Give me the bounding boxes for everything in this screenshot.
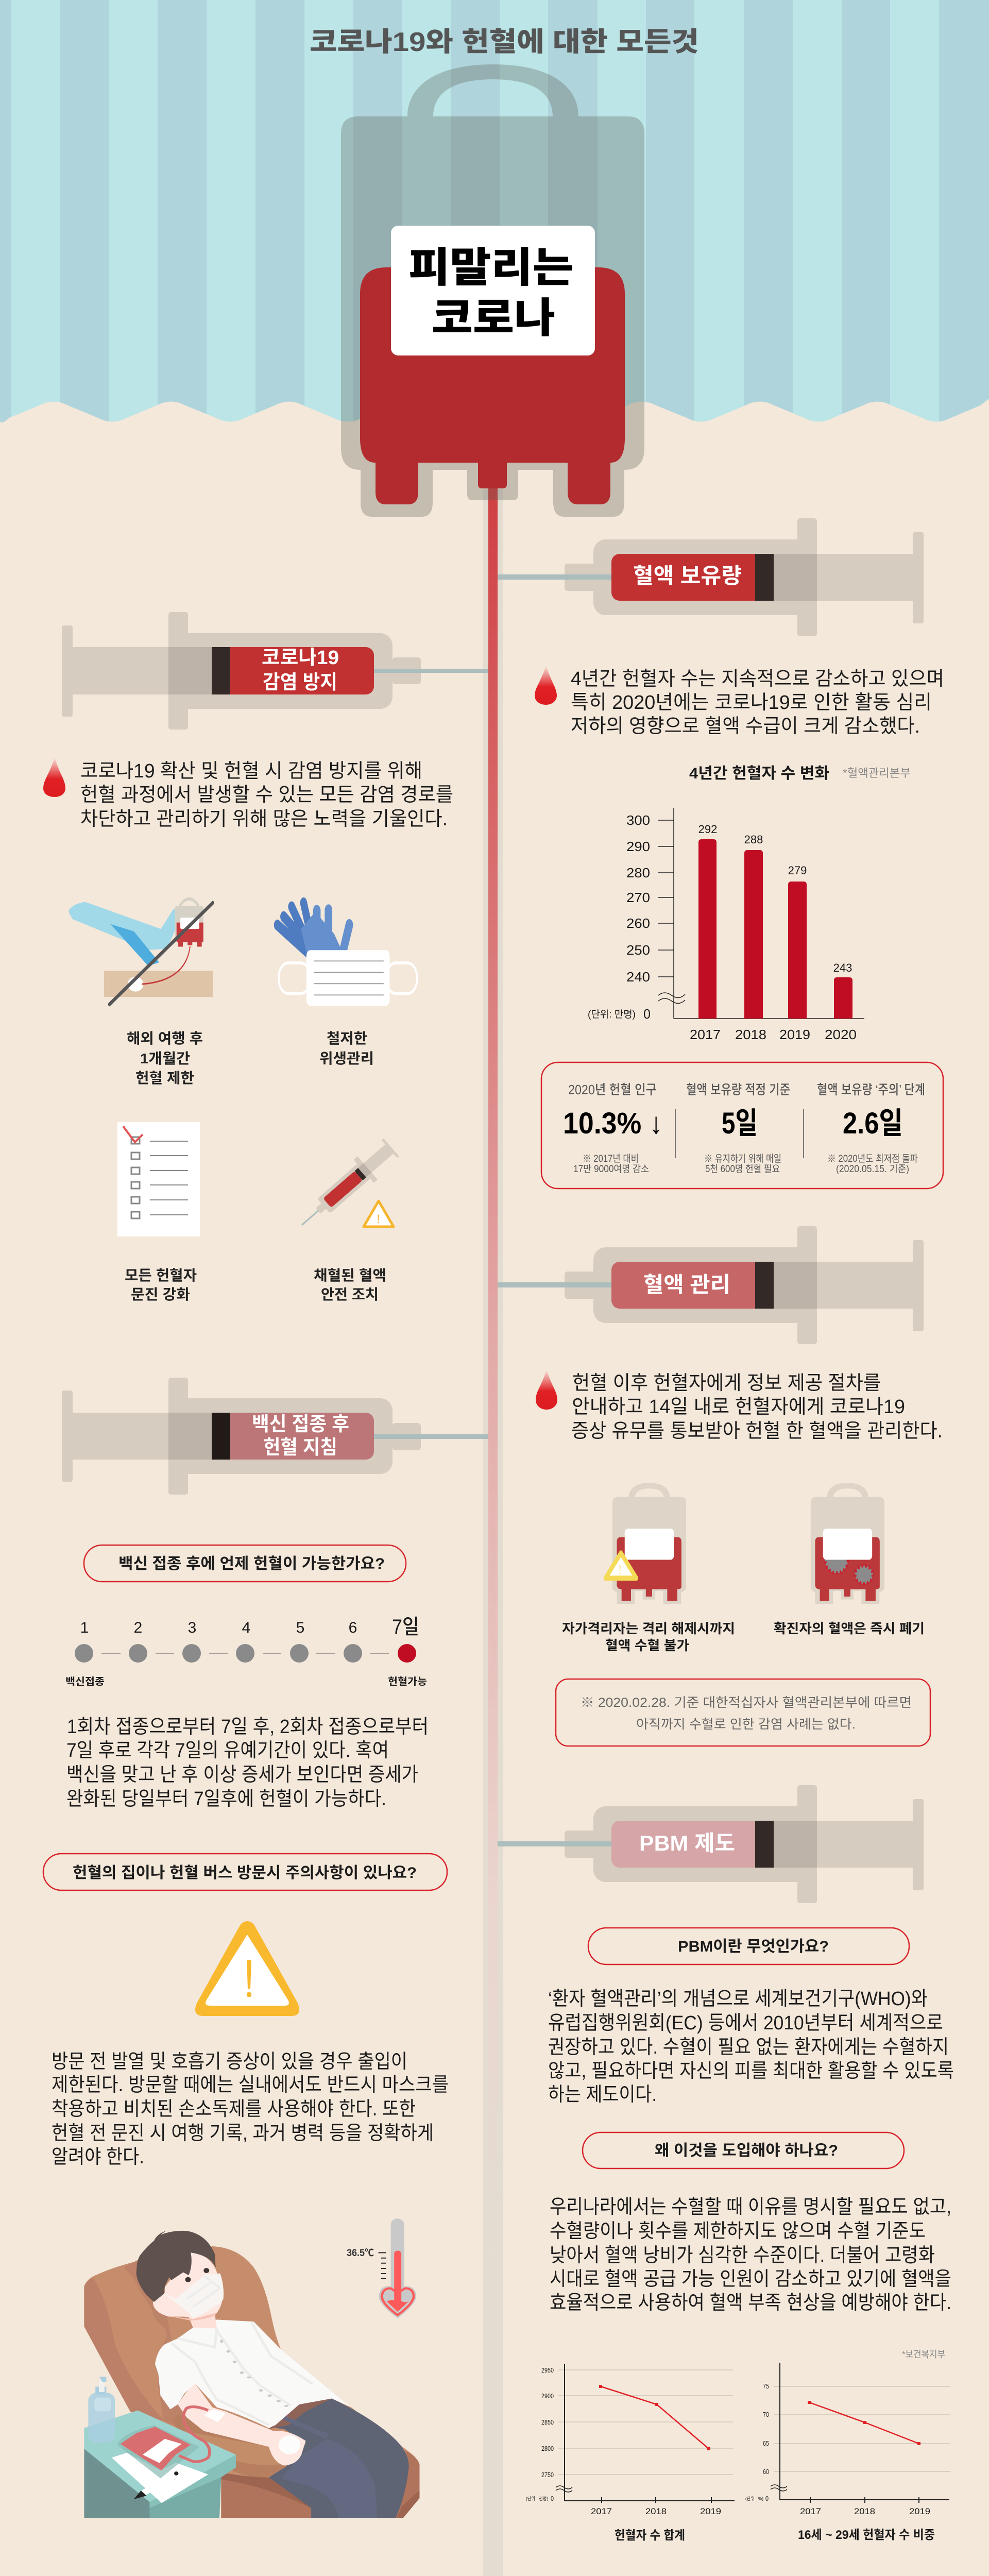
text block: blood stock intro: 저하의 영향으로 혈액 수급이 크게 감소했다.	[571, 716, 920, 737]
bag white label	[391, 226, 595, 355]
text block: infection prevention intro: 코로나19 확산 및 헌혈 시 감염 방지를 위해	[80, 760, 422, 782]
icon: small syringe and warning: !	[377, 1212, 380, 1226]
bar chart: donors over four years: (단위: 만명)	[588, 1009, 636, 1020]
bag red blood fill	[360, 267, 625, 504]
timeline: seven day deferral: 헌혈가능	[388, 1676, 427, 1687]
icon: blood drop	[536, 1369, 557, 1410]
blood tube running down the page	[483, 487, 503, 2576]
callout: no transfusion infections	[556, 1679, 930, 1746]
text block: icon captions: 문진 강화	[131, 1286, 190, 1302]
text block: visit precautions: 헌혈 전 문진 시 여행 기록, 과거 병력 등을 정확하게	[52, 2123, 434, 2144]
panel: syringe heading 코로나19 감염 방지: 감염 방지	[263, 672, 337, 693]
line chart: total donors: (단위 : 천명)	[526, 2496, 548, 2501]
icon: airplane with blood donation crossed out	[69, 899, 213, 1004]
text block: deferral explanation: 1회차 접종으로부터 7일 후, 2회차 접종으로부터	[67, 1716, 429, 1738]
text block: visit precautions: 방문 전 발열 및 호흡기 증상이 있을 경우 출입이	[52, 2051, 407, 2073]
line chart: donors aged 16 to 29: 2018	[854, 2506, 875, 2516]
text block: icon captions	[125, 1030, 386, 1302]
icon: confirmed patient blood bag with virus	[811, 1483, 884, 1604]
line chart: donors aged 16 to 29: 75	[763, 2382, 769, 2390]
text block: icon captions: 위생관리	[319, 1050, 374, 1066]
panel: stat summary box	[541, 1062, 943, 1189]
heading pill: what is PBM: PBM이란 무엇인가요?	[678, 1938, 829, 1955]
text block: why PBM: 시대로 혈액 공급 가능 인원이 감소하고 있기에 혈액을	[550, 2268, 951, 2290]
callout: no transfusion infections: ※ 2020.02.28. 기준 대한적십자사 혈액관리본부에 따르면	[581, 1696, 912, 1710]
icon: questionnaire checklist	[117, 1122, 200, 1236]
timeline: seven day deferral: 2	[134, 1619, 142, 1636]
line chart: total donors: 2800	[541, 2445, 554, 2452]
timeline: seven day deferral: 5	[296, 1619, 304, 1636]
hero title text: 피말리는	[408, 245, 574, 291]
heading pill: what is PBM	[588, 1928, 909, 1964]
text block: blood management intro: 안내하고 14일 내로 헌혈자에게 코로나19	[572, 1396, 905, 1418]
line chart: total donors: 2750	[541, 2471, 554, 2479]
icon: gloves and mask	[278, 903, 417, 1006]
text block: visit precautions: 알려야 한다.	[52, 2146, 144, 2168]
line chart: total donors: 2017	[591, 2506, 612, 2516]
icon: quarantine blood bag with warning: !	[619, 1562, 621, 1577]
icon: blood drop	[535, 665, 557, 705]
text block: blood bag captions	[562, 1621, 925, 1653]
bar chart: donors over four years: 250	[626, 942, 650, 958]
line chart: donors aged 16 to 29: *보건복지부	[902, 2349, 945, 2360]
text block: deferral explanation: 완화된 당일부터 7일후에 헌혈이 가능하다.	[66, 1788, 386, 1810]
bar chart: donors over four years: 288	[744, 833, 763, 846]
label: body temperature: 36.5℃	[347, 2248, 374, 2259]
text block: why PBM: 낮아서 혈액 낭비가 심각한 수준이다. 더불어 고령화	[550, 2245, 935, 2266]
text block: deferral explanation: 7일 후로 각각 7일의 유예기간이 있다. 혹여	[66, 1740, 389, 1761]
text block: infection prevention intro: 차단하고 관리하기 위해 많은 노력을 기울인다.	[80, 808, 448, 830]
panel: stat summary box: ※ 유지하기 위해 매일	[704, 1153, 781, 1164]
bar chart: donors over four years: *혈액관리본부	[843, 767, 911, 779]
panel: stat summary box: 2.6일	[843, 1107, 903, 1140]
bar chart: donors over four years	[588, 765, 911, 1042]
text block: why PBM: 수혈량이나 횟수를 제한하지도 않으며 수혈 기준도	[550, 2221, 926, 2242]
text block: deferral explanation: 백신을 맞고 난 후 이상 증세가 보인다면 증세가	[66, 1764, 418, 1786]
bar chart: donors over four years: 280	[626, 865, 650, 880]
blood bag hero	[341, 64, 644, 517]
text block: PBM definition: 않고, 필요하다면 자신의 피를 최대한 활용할 수 있도록	[548, 2060, 954, 2082]
line chart: total donors: 2018	[645, 2506, 667, 2516]
panel: syringe heading 혈액 보유량: 혈액 보유량	[633, 564, 742, 588]
panel: stat summary box: 5천 600명 헌혈 필요	[705, 1163, 780, 1175]
icon: quarantine blood bag with warning	[605, 1483, 686, 1604]
icon: thermometer with heart	[379, 2218, 416, 2318]
bar chart: donors over four years: 2019	[779, 1027, 810, 1042]
line chart: donors aged 16 to 29: 60	[763, 2468, 769, 2476]
bar chart: donors over four years: 0	[643, 1006, 651, 1022]
heading pill: why adopt: 왜 이것을 도입해야 하나요?	[655, 2142, 838, 2159]
panel: syringe heading 코로나19 감염 방지: 코로나19	[262, 647, 339, 669]
panel: stat summary box: 10.3% ↓	[563, 1107, 663, 1140]
line chart: donors aged 16 to 29: 16세 ~ 29세 헌혈자 수 비중	[798, 2528, 935, 2542]
text block: why PBM: 우리나라에서는 수혈할 때 이유를 명시할 필요도 없고,	[550, 2196, 951, 2218]
text block: icon captions: 안전 조치	[321, 1286, 379, 1302]
text block: PBM definition	[548, 1988, 954, 2106]
text block: PBM definition: 하는 제도이다.	[548, 2084, 657, 2106]
panel: stat summary box: 5일	[722, 1107, 758, 1140]
text block: visit precautions	[52, 2051, 449, 2168]
panel: stat summary box: (2020.05.15. 기준)	[836, 1163, 909, 1175]
timeline: seven day deferral: 7일	[392, 1616, 419, 1638]
text block: PBM definition: 유럽집행위원회(EC) 등에서 2010년부터 세계적으로	[548, 2012, 943, 2034]
bag outer translucent shell with hook	[341, 64, 644, 517]
line chart: total donors: 0	[551, 2495, 554, 2502]
icon: blood drop	[43, 757, 65, 797]
text block: blood stock intro: 4년간 헌혈자 수는 지속적으로 감소하고 있으며	[571, 668, 944, 690]
text block: blood stock intro	[571, 668, 944, 737]
text block: blood bag captions: 자가격리자는 격리 해제시까지	[562, 1621, 735, 1636]
text block: icon captions: 철저한	[327, 1030, 367, 1046]
text block: infection prevention intro	[80, 760, 453, 830]
panel: syringe heading 혈액 관리	[498, 1226, 924, 1344]
heading pill: when can I donate after vaccination: 백신 접종 후에 언제 헌혈이 가능한가요?	[118, 1555, 385, 1572]
text block: icon captions: 채혈된 혈액	[314, 1267, 386, 1283]
bar chart: donors over four years: 2018	[735, 1027, 766, 1042]
text block: PBM definition: ‘환자 혈액관리’의 개념으로 세계보건기구(WHO)와	[548, 1988, 928, 2010]
timeline: seven day deferral: 1	[80, 1619, 89, 1636]
panel: syringe heading 혈액 관리: 혈액 관리	[643, 1273, 730, 1297]
hero title text: 코로나	[432, 295, 555, 341]
text block: why PBM: 효율적으로 사용하여 혈액 부족 현상을 예방해야 한다.	[550, 2292, 951, 2314]
text block: visit precautions: 착용하고 비치된 손소독제를 사용해야 한다. 또한	[52, 2098, 416, 2120]
text block: blood stock intro: 특히 2020년에는 코로나19로 인한 활동 심리	[571, 692, 932, 714]
panel: syringe heading 백신 접종 후 헌혈 지침: 백신 접종 후	[252, 1414, 349, 1435]
bar chart: donors over four years: 2020	[825, 1027, 857, 1042]
line chart: donors aged 16 to 29	[745, 2349, 950, 2542]
panel: stat summary box: 17만 9000여명 감소	[573, 1163, 649, 1175]
text block: blood management intro: 헌혈 이후 헌혈자에게 정보 제공 절차를	[572, 1372, 881, 1394]
text block: blood management intro	[571, 1372, 943, 1442]
line chart: donors aged 16 to 29: 65	[763, 2439, 769, 2447]
panel: stat summary box: 혈액 보유량 ‘주의’ 단계	[817, 1082, 925, 1097]
panel: stat summary box: 2020년 헌혈 인구	[568, 1082, 657, 1097]
panel: syringe heading 백신 접종 후 헌혈 지침	[62, 1378, 488, 1495]
timeline: seven day deferral: 백신접종	[65, 1676, 105, 1687]
bar chart: donors over four years: 279	[788, 864, 807, 877]
line chart: donors aged 16 to 29: 2017	[800, 2506, 821, 2516]
line chart: donors aged 16 to 29: (단위 : %)	[745, 2496, 763, 2501]
text block: blood bag captions: 혈액 수혈 불가	[605, 1638, 689, 1653]
heading pill: when can I donate after vaccination	[84, 1545, 406, 1582]
bar chart: donors over four years: 300	[626, 812, 650, 828]
text block: deferral explanation	[66, 1716, 429, 1810]
line chart: total donors: 헌혈자 수 합계	[615, 2529, 685, 2543]
panel: syringe heading 혈액 보유량	[498, 518, 924, 636]
heading pill: blood centre visit precautions: 헌혈의 집이나 헌혈 버스 방문시 주의사항이 있나요?	[73, 1865, 417, 1882]
title: 코로나19와 헌혈에 대한 모든것	[310, 27, 699, 57]
timeline: seven day deferral	[65, 1616, 427, 1687]
bar chart: donors over four years: 270	[626, 890, 650, 905]
panel: syringe heading 코로나19 감염 방지	[62, 612, 488, 730]
bar chart: donors over four years: 292	[698, 823, 717, 836]
panel: stat summary box: 혈액 보유량 적정 기준	[686, 1082, 790, 1097]
panel: syringe heading PBM 제도	[498, 1785, 924, 1903]
text block: visit precautions: 제한된다. 방문할 때에는 실내에서도 반드시 마스크를	[52, 2074, 449, 2096]
text block: icon captions: 모든 헌혈자	[125, 1267, 197, 1283]
line chart: donors aged 16 to 29: 70	[763, 2411, 769, 2418]
bar chart: donors over four years: 243	[833, 961, 852, 974]
bar chart: donors over four years: 2017	[690, 1027, 721, 1042]
text block: PBM definition: 권장하고 있다. 수혈이 필요 없는 환자에게는 수혈하지	[548, 2037, 949, 2058]
text block: icon captions: 헌혈 제한	[135, 1070, 194, 1086]
callout: no transfusion infections: 아직까지 수혈로 인한 감염 사례는 없다.	[636, 1717, 856, 1732]
text block: icon captions: 1개월간	[140, 1050, 190, 1066]
bar chart: donors over four years: 240	[626, 969, 650, 985]
panel: syringe heading PBM 제도: PBM 제도	[639, 1831, 735, 1855]
heading pill: why adopt	[583, 2132, 904, 2168]
line chart: total donors: 2019	[700, 2506, 721, 2516]
illustration: masked patient donating blood in a chair	[84, 2231, 419, 2518]
line chart: donors aged 16 to 29: 0	[765, 2495, 769, 2502]
bar chart: donors over four years: 290	[626, 839, 650, 854]
timeline: seven day deferral: 4	[242, 1619, 250, 1636]
bar chart: donors over four years: 4년간 헌혈자 수 변화	[689, 765, 829, 782]
timeline: seven day deferral: 3	[188, 1619, 196, 1636]
text block: why PBM	[550, 2196, 951, 2314]
text block: blood bag captions: 확진자의 혈액은 즉시 폐기	[774, 1621, 925, 1636]
line chart: donors aged 16 to 29: 2019	[909, 2506, 930, 2516]
line chart: total donors: 2900	[541, 2392, 554, 2400]
icon: small syringe and warning	[292, 1136, 401, 1236]
timeline: seven day deferral: 6	[349, 1619, 357, 1636]
line chart: total donors: 2850	[541, 2418, 554, 2426]
panel: stat summary box: ※ 2020년도 최저점 돌파	[827, 1153, 918, 1164]
text block: infection prevention intro: 헌혈 과정에서 발생할 수 있는 모든 감염 경로를	[80, 784, 453, 806]
line chart: total donors: 2950	[541, 2366, 554, 2374]
panel: syringe heading 백신 접종 후 헌혈 지침: 헌혈 지침	[263, 1437, 337, 1459]
text block: blood management intro: 증상 유무를 통보받아 헌혈 한 혈액을 관리한다.	[571, 1420, 943, 1442]
heading pill: blood centre visit precautions	[43, 1854, 447, 1890]
text block: icon captions: 해외 여행 후	[127, 1030, 203, 1046]
icon: large warning triangle	[195, 1921, 299, 2016]
panel: stat summary box: ※ 2017년 대비	[583, 1153, 639, 1164]
line chart: total donors	[526, 2364, 735, 2543]
hero title text	[408, 245, 574, 341]
bar chart: donors over four years: 260	[626, 916, 650, 931]
